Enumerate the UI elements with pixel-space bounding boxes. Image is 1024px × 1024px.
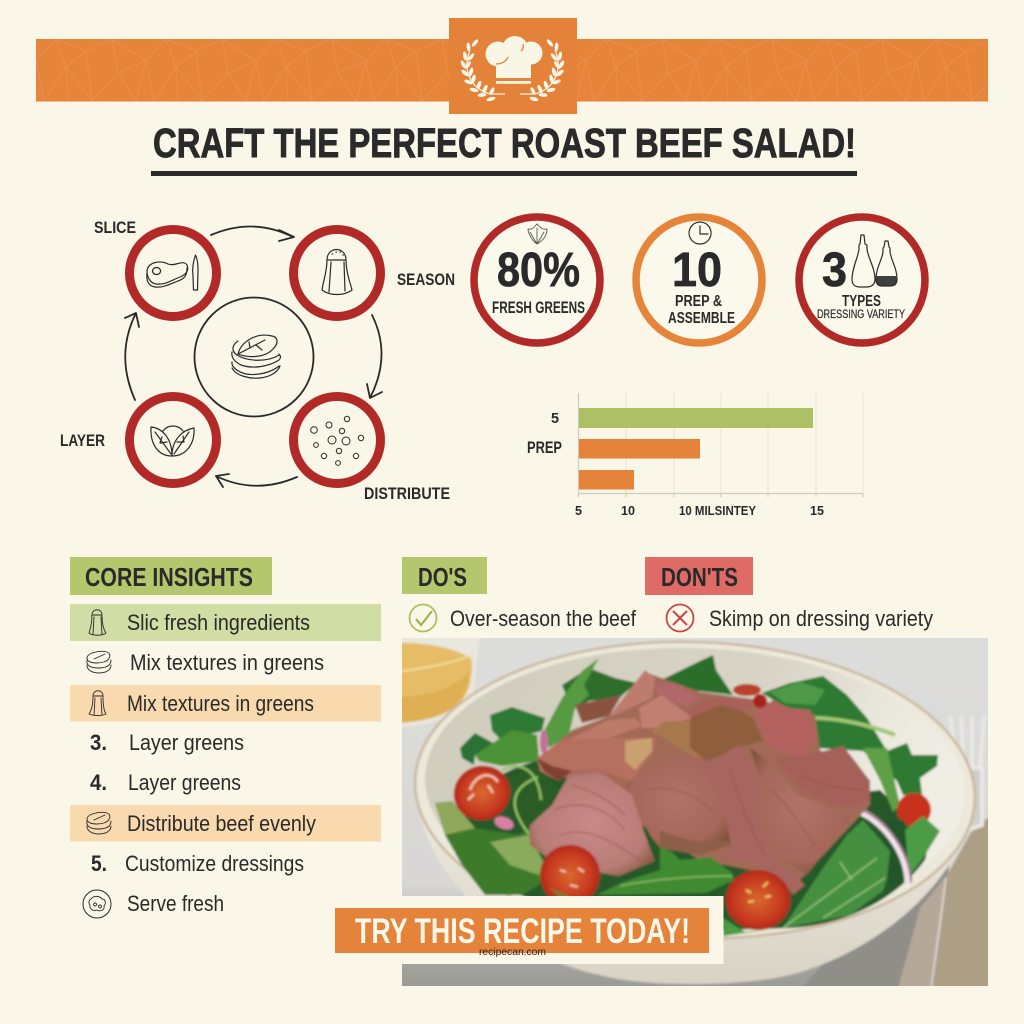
row: 3 layer greens <box>90 730 244 755</box>
bar: orange short <box>579 470 634 490</box>
process cycle diagram <box>60 218 455 503</box>
step: distribute <box>294 396 450 503</box>
bowl <box>417 790 975 984</box>
caption: PREP & <box>675 293 722 310</box>
icon: leaf <box>528 224 547 244</box>
knife and napkin <box>933 815 994 992</box>
row: 3 layer greens: Layer greens <box>129 730 244 755</box>
beef slices <box>530 670 870 895</box>
tomatoes <box>445 756 790 930</box>
stat: 10 prep and assemble <box>636 217 762 343</box>
row: 4 layer greens: 4. <box>90 770 107 795</box>
title <box>151 120 857 176</box>
row: slice fresh ingredients: Slic fresh ingredients <box>127 610 310 635</box>
step: layer <box>60 396 216 484</box>
icon: clock <box>689 222 711 244</box>
caption line 2: DRESSING VARIETY <box>817 307 905 321</box>
emblem: chef hat with laurel <box>449 18 577 114</box>
row: customize dressings: 5. <box>91 851 107 876</box>
value: 80% <box>497 244 580 297</box>
heading: CORE INSIGHTS <box>85 562 253 592</box>
heading <box>402 557 487 594</box>
caption: FRESH GREENS <box>492 298 585 317</box>
arugula lower center <box>597 847 734 895</box>
x axis labels: 5 <box>575 503 582 518</box>
row: serve fresh <box>83 890 224 918</box>
row: serve fresh: Serve fresh <box>127 891 224 916</box>
center circle with plated leaves <box>194 298 314 416</box>
y label: prep: PREP <box>527 439 562 457</box>
x axis labels: 10 <box>621 503 635 518</box>
row: mix textures: Mix textures in greens <box>130 650 324 675</box>
row: mix textures highlighted: Mix textures in greens <box>127 691 314 716</box>
arrow: season to distribute <box>367 315 382 398</box>
icon: salt shaker <box>322 250 352 294</box>
red onion <box>493 730 911 883</box>
row: distribute beef: Distribute beef evenly <box>127 811 316 836</box>
x axis labels <box>575 503 824 518</box>
arrow: distribute to layer <box>216 474 297 487</box>
icon: dressing bottles <box>852 235 897 287</box>
stat: 3 types dressing variety <box>799 217 925 343</box>
value: 3 <box>822 244 847 297</box>
arrow: layer to slice <box>125 313 139 400</box>
row: 3 layer greens: 3. <box>90 730 107 755</box>
label: season: SEASON <box>397 270 455 289</box>
row: distribute beef <box>70 805 381 842</box>
panel: don'ts <box>645 557 934 632</box>
icon: leaves <box>151 426 194 456</box>
dark green underlay <box>455 760 927 930</box>
caption: TYPES <box>842 293 881 310</box>
header banner <box>36 18 988 114</box>
heading <box>70 557 272 595</box>
bar: orange prep <box>579 439 700 458</box>
item with cross icon <box>666 604 934 632</box>
panel: do's <box>402 557 637 632</box>
item with check icon: Over-season the beef <box>450 606 637 631</box>
greens lower right <box>723 816 940 936</box>
panel: core insights <box>70 557 381 918</box>
x axis labels: 15 <box>810 503 824 518</box>
row: mix textures highlighted <box>70 685 381 722</box>
value: 10 <box>672 244 722 297</box>
row: 4 layer greens: Layer greens <box>128 770 241 795</box>
caption line 2: ASSEMBLE <box>668 310 735 327</box>
label: layer: LAYER <box>60 431 105 450</box>
bar: green <box>579 408 813 428</box>
bar chart <box>527 393 863 518</box>
y label: 5: 5 <box>551 410 559 427</box>
photo: roast beef salad bowl <box>396 632 994 992</box>
call to action <box>335 896 724 964</box>
row: customize dressings: Customize dressings <box>125 851 304 876</box>
heading: DO'S <box>418 562 467 592</box>
tomato right <box>897 793 931 827</box>
heading: DON'TS <box>661 562 738 592</box>
source credit: recipecan.com <box>479 946 546 958</box>
item with check icon <box>410 604 637 632</box>
row: 4 layer greens <box>90 770 241 795</box>
title: CRAFT THE PERFECT ROAST BEEF SALAD! <box>153 120 856 166</box>
heading <box>645 557 753 595</box>
label: distribute: DISTRIBUTE <box>364 484 450 503</box>
dressing dish <box>396 632 480 728</box>
item with cross icon: Skimp on dressing variety <box>709 606 934 631</box>
row: slice fresh ingredients <box>70 604 381 641</box>
icon: scattered seasoning <box>311 416 364 465</box>
call to action: TRY THIS RECIPE TODAY! <box>355 912 690 951</box>
greens upper left <box>435 658 637 895</box>
stat: 80% fresh greens <box>474 217 600 343</box>
label: slice: SLICE <box>94 218 136 237</box>
step: season <box>294 230 455 316</box>
step: slice <box>94 218 216 316</box>
fork <box>950 716 984 830</box>
arrow: slice to season <box>211 226 294 241</box>
icon: steak and knife <box>147 255 198 290</box>
x axis labels: 10 MILSINTEY <box>679 503 756 518</box>
greens top and right <box>655 655 938 812</box>
